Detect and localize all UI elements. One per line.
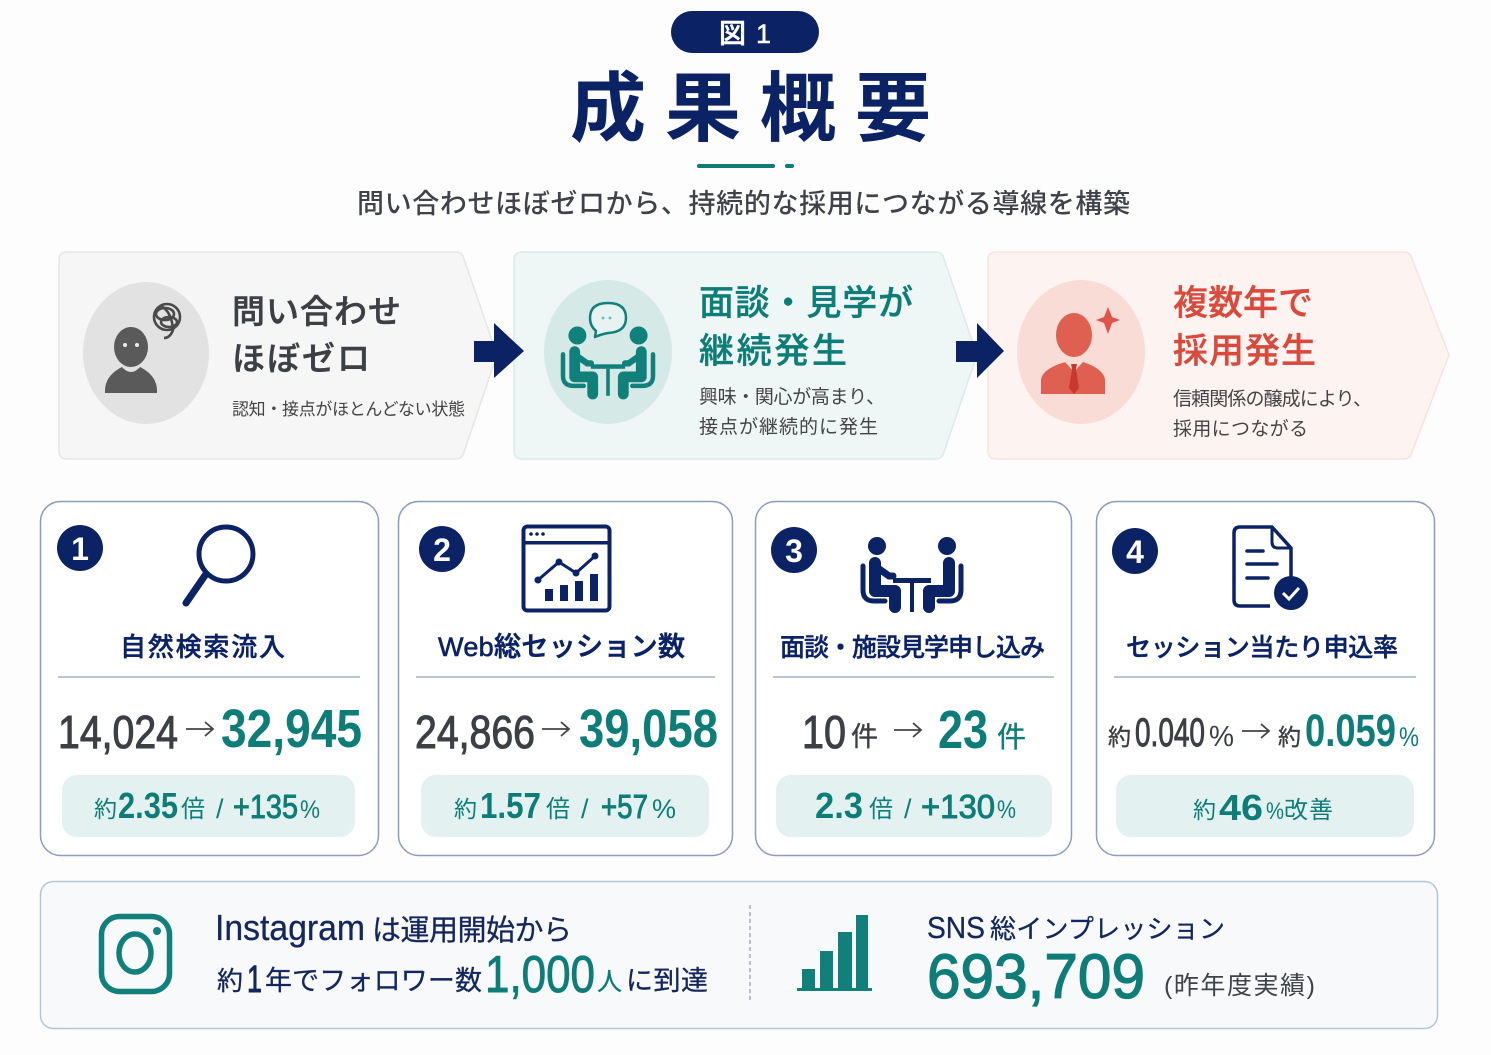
growth pill bbox=[421, 775, 709, 837]
impressions text: (昨年度実績) bbox=[1164, 972, 1315, 1000]
badge 1: 1 bbox=[71, 531, 89, 567]
card title: 面談・施設見学申し込み bbox=[780, 634, 1045, 662]
panel: card 2 web sessions bbox=[398, 502, 732, 856]
icon: two people at table bbox=[863, 537, 961, 612]
heading: 継続発生 bbox=[699, 332, 847, 371]
icon: bar chart bbox=[797, 915, 872, 991]
values: 件 bbox=[997, 721, 1026, 754]
values: % bbox=[1399, 722, 1419, 752]
values: 件 bbox=[851, 722, 878, 752]
panel: stage 1 inquiries near zero bbox=[59, 252, 497, 459]
description: 採用につながる bbox=[1173, 418, 1308, 440]
panel: card 3 interview applications bbox=[756, 502, 1072, 856]
heading bbox=[699, 284, 913, 371]
growth pill: 倍 bbox=[181, 796, 205, 823]
values: 23 bbox=[938, 700, 988, 760]
description: 興味・関心が高まり、 bbox=[699, 386, 885, 408]
icon: confused person bbox=[83, 282, 209, 424]
badge 4 bbox=[1112, 528, 1158, 574]
growth pill: +130 bbox=[921, 788, 995, 825]
growth pill: / bbox=[581, 794, 589, 824]
growth pill: 2.35 bbox=[118, 785, 178, 826]
growth pill: 倍 bbox=[546, 796, 570, 823]
growth pill: +135 bbox=[233, 788, 298, 825]
values: 32,945 bbox=[221, 699, 362, 759]
values: 約 bbox=[1278, 724, 1301, 750]
icon: magnifying glass bbox=[186, 527, 253, 603]
description bbox=[699, 386, 885, 438]
growth pill: / bbox=[216, 794, 224, 824]
figure label pill: 図 1 bbox=[719, 19, 771, 49]
card title: セッション当たり申込率 bbox=[1126, 634, 1398, 662]
values: 0.040 bbox=[1135, 711, 1205, 755]
title accent line bbox=[697, 164, 794, 168]
values bbox=[58, 699, 362, 759]
badge 3: 3 bbox=[785, 533, 803, 569]
heading: 問い合わせ bbox=[232, 293, 401, 330]
panel: social media results bbox=[40, 882, 1438, 1028]
growth pill bbox=[62, 775, 355, 837]
description bbox=[1173, 388, 1372, 440]
icon: instagram bbox=[102, 916, 170, 992]
description: 接点が継続的に発生 bbox=[699, 416, 878, 438]
instagram text: 約 bbox=[217, 966, 243, 996]
growth pill: 2.3 bbox=[815, 785, 863, 826]
heading: 面談・見学が bbox=[699, 284, 913, 323]
impressions text: SNS bbox=[927, 910, 985, 945]
growth pill: 46 bbox=[1219, 787, 1263, 828]
values: 14,024 bbox=[58, 706, 178, 758]
growth pill: 約 bbox=[1193, 797, 1216, 823]
badge 1 bbox=[57, 525, 103, 571]
icon: browser analytics bbox=[524, 526, 610, 610]
title: 成果概要 bbox=[570, 67, 931, 152]
instagram text: 年でフォロワー数 bbox=[265, 966, 482, 996]
growth pill: % bbox=[652, 794, 676, 824]
growth pill: 約 bbox=[454, 796, 477, 822]
growth pill: 倍 bbox=[869, 796, 893, 823]
arrow: stage 2 to 3 bbox=[956, 323, 1004, 378]
badge 2: 2 bbox=[433, 532, 451, 568]
growth pill: % bbox=[300, 796, 320, 824]
instagram text: は運用開始から bbox=[372, 914, 572, 947]
values: 0.059 bbox=[1305, 705, 1396, 756]
growth pill: +57 bbox=[601, 788, 648, 825]
figure label pill bbox=[671, 11, 819, 53]
growth pill: 改善 bbox=[1284, 797, 1333, 824]
instagram text: 1 bbox=[247, 959, 262, 1001]
values: 10 bbox=[802, 706, 846, 758]
heading: ほぼゼロ bbox=[232, 340, 370, 377]
values bbox=[802, 700, 1026, 760]
growth pill: % bbox=[1266, 798, 1284, 825]
icon: meeting with speech bubble bbox=[544, 280, 672, 424]
panel: card 1 organic search bbox=[40, 502, 378, 856]
values bbox=[415, 699, 718, 759]
icon: person with sparkle bbox=[1017, 280, 1145, 424]
description: 信頼関係の醸成により、 bbox=[1173, 388, 1372, 410]
badge 3 bbox=[771, 527, 817, 573]
growth pill bbox=[1116, 775, 1414, 837]
heading bbox=[232, 293, 401, 377]
badge 2 bbox=[419, 526, 465, 572]
heading: 複数年で bbox=[1173, 284, 1313, 323]
impressions text bbox=[927, 910, 1315, 1012]
growth pill: / bbox=[904, 794, 912, 824]
heading: 採用発生 bbox=[1173, 332, 1316, 371]
arrow: stage 1 to 2 bbox=[474, 323, 524, 378]
card title: Web総セッション数 bbox=[438, 632, 685, 662]
instagram text: 1,000 bbox=[485, 946, 595, 1004]
growth pill: 約 bbox=[94, 796, 117, 822]
instagram text: Instagram bbox=[215, 907, 365, 948]
panel: stage 2 interviews continuing bbox=[514, 252, 977, 459]
icon: document with check bbox=[1234, 527, 1308, 610]
values: % bbox=[1209, 721, 1234, 753]
growth pill: % bbox=[997, 796, 1016, 824]
values: 39,058 bbox=[579, 699, 718, 759]
panel: stage 3 hiring over years bbox=[988, 252, 1449, 459]
impressions text: 総インプレッション bbox=[990, 914, 1225, 944]
description: 認知・接点がほとんどない状態 bbox=[232, 400, 465, 419]
values: 約 bbox=[1108, 724, 1131, 750]
panel: card 4 application rate bbox=[1096, 502, 1434, 856]
badge 4: 4 bbox=[1126, 534, 1144, 570]
instagram text: 人 bbox=[597, 968, 622, 996]
impressions text: 693,709 bbox=[927, 942, 1145, 1012]
growth pill bbox=[776, 775, 1052, 837]
instagram text bbox=[215, 907, 708, 1004]
card title: 自然検索流入 bbox=[120, 632, 285, 662]
instagram text: に到達 bbox=[626, 966, 708, 996]
growth pill: 1.57 bbox=[480, 785, 541, 826]
values: 24,866 bbox=[415, 706, 535, 758]
subtitle: 問い合わせほぼゼロから、持続的な採用につながる導線を構築 bbox=[357, 189, 1130, 219]
heading bbox=[1173, 284, 1316, 371]
values bbox=[1108, 705, 1419, 756]
